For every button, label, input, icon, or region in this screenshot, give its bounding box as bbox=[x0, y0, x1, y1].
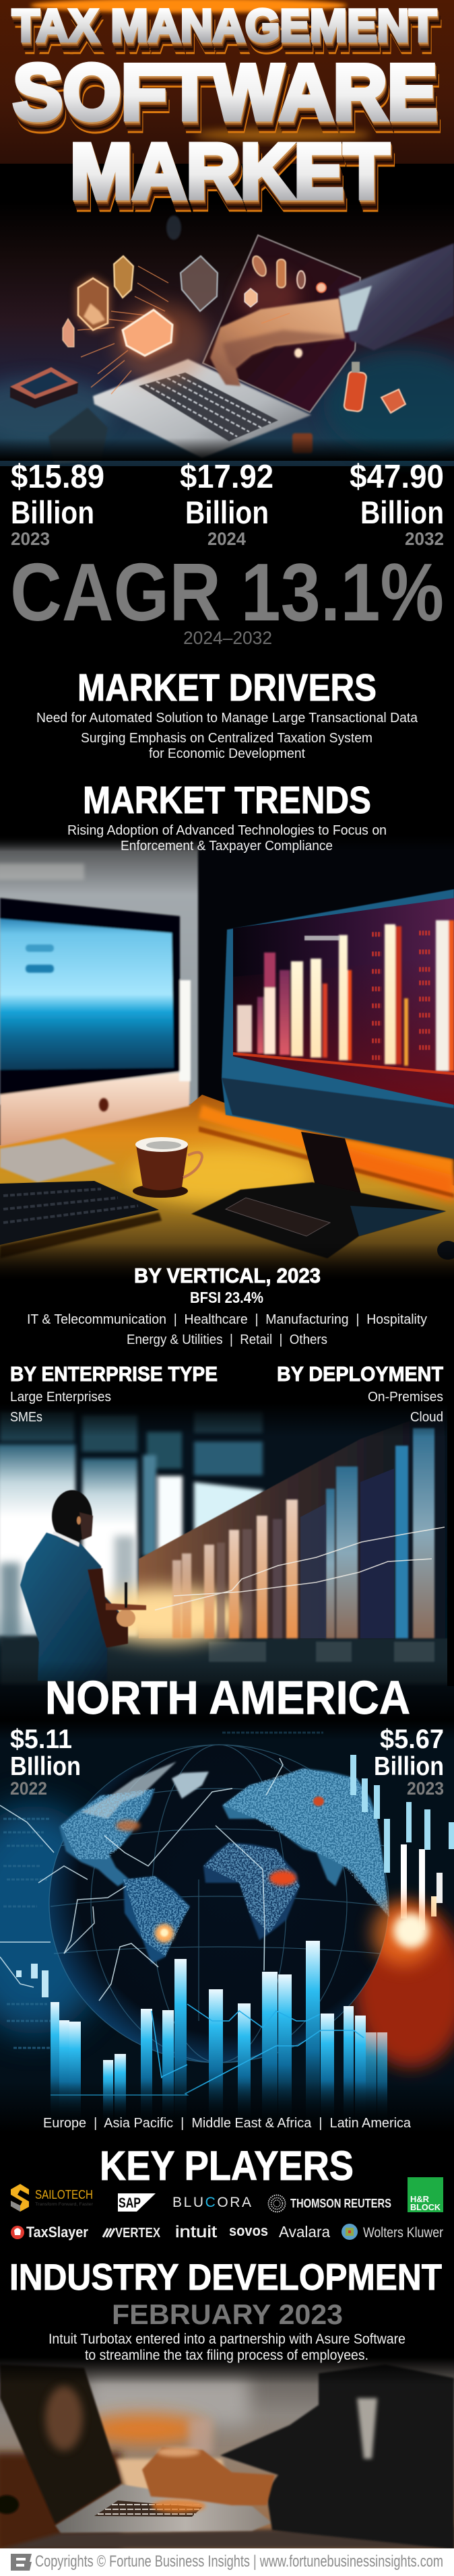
collar bbox=[53, 1531, 79, 1547]
stat 2022 bbox=[10, 1725, 81, 1799]
bright window panes bbox=[0, 1444, 263, 1637]
logo: h&r block bbox=[408, 2177, 443, 2212]
hotspot: asia bbox=[313, 1797, 324, 1806]
item: smes: SMEs bbox=[10, 1410, 42, 1425]
bottom fade bbox=[0, 1243, 454, 1280]
title line: Software: SOFTWARE bbox=[13, 48, 437, 136]
stat 2022: $5.11 bbox=[10, 1725, 72, 1754]
sun glow bbox=[372, 1901, 436, 1966]
sun flare bbox=[393, 1913, 428, 1948]
logo: h&r block: H&R bbox=[410, 2194, 430, 2204]
hero bottom fade bbox=[0, 438, 454, 461]
blue screen bbox=[0, 919, 174, 1070]
orange glow behind right monitor bbox=[199, 1105, 454, 1192]
bezel bbox=[0, 898, 180, 1095]
knuckle highlight bbox=[157, 2447, 200, 2457]
dark object bbox=[0, 2495, 19, 2514]
blur labels on left screen bbox=[26, 944, 54, 952]
stat 2023: 2023 bbox=[11, 529, 50, 549]
orange sunset glow bbox=[84, 2414, 205, 2444]
key players bbox=[11, 2143, 443, 2241]
continent: greenland bbox=[172, 1772, 209, 1799]
heading: market trends: MARKET TRENDS bbox=[83, 779, 371, 822]
logo: sap: SAP bbox=[119, 2195, 141, 2211]
photo top fade bbox=[0, 1720, 454, 1740]
white chin bbox=[0, 1071, 190, 1147]
item: cloud: Cloud bbox=[410, 1410, 443, 1425]
hand sparkle bbox=[294, 348, 302, 358]
warm glow bbox=[88, 1587, 242, 1644]
CAGR period: 2024–2032 bbox=[183, 628, 272, 648]
stat 2023: $5.67 bbox=[380, 1725, 444, 1754]
backdrop bbox=[0, 1403, 454, 1720]
jacket bbox=[20, 1533, 127, 1681]
stat 2032 bbox=[350, 459, 444, 549]
desk surface bbox=[0, 1095, 454, 1280]
hero background bbox=[0, 202, 454, 466]
logo: sailotech bbox=[11, 2184, 94, 2212]
backdrop bbox=[0, 1720, 454, 2131]
globe meridians bbox=[49, 1745, 389, 2063]
display bars bbox=[172, 1428, 434, 1638]
typing hands photo bbox=[0, 2358, 454, 2553]
stand foot bbox=[0, 1138, 116, 1182]
bar chart bbox=[51, 1941, 387, 2121]
icon: small cube bbox=[245, 288, 257, 307]
heading: by enterprise type: BY ENTERPRISE TYPE bbox=[10, 1362, 218, 1386]
coffee cup bbox=[133, 1137, 202, 1198]
date: FEBRUARY 2023 bbox=[112, 2298, 343, 2330]
stat 2024: 2024 bbox=[207, 529, 246, 549]
tablet bbox=[106, 1603, 146, 1610]
suit bbox=[220, 2364, 454, 2549]
logo: intuit: intuit bbox=[175, 2223, 217, 2241]
hero top fade bbox=[0, 164, 454, 211]
backdrop room bbox=[0, 2358, 454, 2549]
photo bottom fade bbox=[0, 1661, 454, 1721]
continent: south america bbox=[123, 1876, 190, 1964]
chart bars bbox=[237, 920, 454, 1071]
monitor base bbox=[191, 1182, 446, 1258]
blurred building bbox=[115, 1536, 135, 1617]
logo: sailotech: SAILOTECH bbox=[35, 2188, 93, 2201]
glow on lid bbox=[239, 272, 300, 321]
display blue panels bbox=[300, 1504, 326, 1638]
keys glow bbox=[152, 2499, 205, 2513]
heading: market drivers: MARKET DRIVERS bbox=[77, 666, 377, 709]
warm desk left bbox=[0, 2452, 121, 2553]
keyboard bbox=[139, 373, 278, 441]
trend lines bbox=[155, 1527, 445, 1610]
route lines bbox=[0, 1758, 283, 2001]
photo right fade bbox=[447, 1403, 454, 1686]
continent: africa bbox=[203, 1842, 300, 1940]
icon: capsule bbox=[250, 254, 269, 278]
development text line 2: to streamline the tax filing process of employees. bbox=[85, 2348, 368, 2363]
man bbox=[20, 1490, 146, 1681]
orange ledge right bbox=[337, 1145, 454, 1202]
laptop lid bbox=[203, 235, 360, 412]
icon: shield bbox=[77, 276, 109, 331]
glowing network lines bbox=[77, 266, 290, 394]
phone on base bbox=[226, 1198, 330, 1236]
logo: h&r block: BLOCK bbox=[410, 2202, 441, 2212]
hand bbox=[142, 2447, 275, 2505]
logo: sap bbox=[118, 2193, 156, 2212]
ledge shadow bbox=[199, 1126, 454, 1198]
logo: blucora: BLUCORA bbox=[172, 2195, 251, 2210]
icon: parcel bbox=[381, 389, 406, 413]
monitor neck bbox=[301, 1132, 365, 1207]
development text line 1: Intuit Turbotax entered into a partnership with Asure Software bbox=[48, 2331, 406, 2347]
hotspot: north america bbox=[116, 1820, 140, 1831]
continent light speckle bbox=[61, 1768, 389, 1957]
stat 2023: Billion bbox=[11, 494, 94, 530]
market trends bbox=[67, 779, 387, 854]
trends text line 1: Rising Adoption of Advanced Technologies to Focus on bbox=[67, 823, 387, 838]
logo: taxslayer: TaxSlayer bbox=[26, 2224, 88, 2241]
enterprise type and deployment segments bbox=[10, 1362, 443, 1425]
leading segment: BFSI 23.4% bbox=[190, 1289, 263, 1306]
item: on-premises: On-Premises bbox=[368, 1390, 443, 1405]
trends text line 2: Enforcement & Taxpayer Compliance bbox=[121, 839, 333, 854]
blurred room light bbox=[88, 2378, 249, 2425]
logo: vertex: VERTEX bbox=[115, 2226, 161, 2241]
logo: sailotech: Transform Forward, Faster bbox=[35, 2202, 94, 2207]
blue glow left bbox=[0, 1805, 115, 2034]
ear bbox=[77, 1516, 81, 1524]
logo: wolters kluwer bbox=[342, 2224, 443, 2241]
globe and bar chart photo bbox=[0, 1720, 454, 2132]
chart labels bbox=[372, 933, 431, 1058]
small orange box bbox=[292, 433, 313, 453]
stat 2024: Billion bbox=[185, 494, 269, 530]
stat 2022: 2022 bbox=[10, 1778, 47, 1799]
continent: eurasia bbox=[222, 1768, 389, 1917]
hero teal glow left bbox=[0, 377, 115, 445]
photo bottom fade bbox=[0, 2082, 454, 2132]
laptop base bbox=[55, 2484, 272, 2533]
driver text 2 second line: for Economic Development bbox=[149, 746, 305, 761]
red glow right bbox=[354, 1906, 454, 2068]
photo top fade bbox=[0, 2358, 454, 2385]
industry development bbox=[9, 2256, 442, 2363]
sleeve bbox=[88, 1568, 128, 1648]
icon: glowing box bbox=[121, 309, 174, 357]
glow behind software bbox=[195, 129, 370, 141]
title background bbox=[0, 0, 454, 164]
hand shadow bbox=[222, 330, 345, 368]
hotspot: africa bbox=[269, 1871, 296, 1886]
head bbox=[52, 1490, 92, 1543]
stat 2023 bbox=[374, 1725, 444, 1799]
photo top fade bbox=[0, 1403, 454, 1437]
lid glow bbox=[45, 2386, 83, 2451]
base blue tint bbox=[350, 1206, 446, 1236]
bright pillar bbox=[189, 2418, 212, 2455]
floor light blocks bbox=[209, 1642, 434, 1662]
driver text 1: Need for Automated Solution to Manage Large Transactional Data bbox=[36, 711, 418, 726]
cuff bbox=[339, 286, 372, 333]
icon: card box bbox=[10, 367, 78, 408]
hotspot core bbox=[160, 1929, 168, 1937]
mouse bbox=[437, 1241, 454, 1260]
shirt bbox=[357, 2398, 377, 2459]
driver text 2: Surging Emphasis on Centralized Taxation System bbox=[81, 731, 372, 746]
continent: arctic light bbox=[81, 1762, 176, 1819]
blurred skyline bbox=[0, 1563, 20, 1644]
top fade bbox=[0, 835, 454, 851]
title with 3D heading bbox=[12, 0, 437, 215]
hand bbox=[117, 1609, 135, 1627]
north america stats bbox=[10, 1725, 444, 1799]
blue frame bbox=[222, 889, 454, 1159]
dark wall bbox=[0, 835, 454, 1280]
market drivers bbox=[36, 666, 418, 761]
logo on left monitor bbox=[99, 1098, 108, 1112]
icon: pale cube bbox=[181, 256, 218, 311]
monitors photo bbox=[0, 835, 454, 1280]
desk bottom bbox=[0, 2526, 454, 2549]
market size stats bbox=[11, 459, 444, 549]
chart title bar bbox=[304, 936, 339, 940]
display wall bbox=[139, 1408, 447, 1638]
stat 2023: $15.89 bbox=[11, 459, 104, 495]
heading: by vertical: BY VERTICAL, 2023 bbox=[134, 1264, 321, 1287]
continent: north america bbox=[59, 1789, 155, 1886]
title line: Tax Management: TAX MANAGEMENT bbox=[12, 0, 436, 51]
yellow desk glow bbox=[131, 1147, 313, 1204]
display dark panel bbox=[360, 1469, 394, 1638]
stat 2032: 2032 bbox=[405, 529, 444, 549]
stat 2023: 2023 bbox=[407, 1778, 444, 1799]
left small candles bbox=[16, 1964, 48, 1997]
device lower left bbox=[48, 408, 108, 463]
stat 2024 bbox=[180, 459, 273, 549]
screen lower red bbox=[233, 957, 454, 1105]
icon: bottle bbox=[344, 362, 367, 412]
lower dim floor bbox=[0, 1637, 454, 1684]
right frame bbox=[179, 980, 191, 1081]
logo: thomson reuters: THOMSON REUTERS bbox=[290, 2197, 391, 2210]
hotspot: south america bbox=[155, 1924, 174, 1943]
heading: by deployment: BY DEPLOYMENT bbox=[277, 1362, 443, 1386]
upper window panes bbox=[0, 1411, 263, 1475]
item: large enterprises: Large Enterprises bbox=[10, 1390, 111, 1405]
stat 2023 bbox=[11, 459, 104, 549]
right monitor bbox=[222, 889, 454, 1159]
logo: thomson reuters bbox=[268, 2195, 391, 2212]
north america heading: NORTH AMERICA bbox=[45, 1671, 410, 1724]
by vertical segment bbox=[27, 1264, 427, 1347]
heading: key players: KEY PLAYERS bbox=[100, 2143, 354, 2189]
keyboard bbox=[0, 1181, 162, 1258]
icon: fortune logo bbox=[11, 2554, 32, 2571]
title line: Market: MARKET bbox=[70, 127, 389, 215]
sleeve bbox=[339, 243, 454, 350]
tablet edge bbox=[125, 1582, 127, 1608]
icon: warm glow centre bbox=[115, 303, 209, 384]
icon: dim top gem bbox=[166, 216, 181, 240]
footer bbox=[0, 2548, 454, 2576]
right chin bbox=[222, 1078, 454, 1159]
icon: tag bbox=[63, 319, 74, 347]
icon: tube bbox=[277, 259, 286, 288]
laptop base bbox=[93, 359, 311, 458]
icon: cube small bbox=[114, 256, 133, 298]
hand bbox=[210, 298, 345, 386]
analyst and bars photo bbox=[0, 1403, 454, 1721]
stat 2022: BIllion bbox=[10, 1752, 81, 1781]
hero image: hand on laptop with glowing icons bbox=[0, 164, 454, 466]
logo: avalara: Avalara bbox=[279, 2223, 330, 2241]
data text texture left bbox=[3, 1733, 323, 2048]
desk light bbox=[116, 2459, 229, 2513]
other regions: Europe | Asia Pacific | Middle East & Africa | Latin America bbox=[43, 2116, 412, 2131]
light wall left bbox=[0, 835, 198, 1105]
segment list line 2: Energy & Utilities | Retail | Others bbox=[127, 1332, 327, 1347]
chart baseline bbox=[233, 1052, 454, 1075]
shelf blur bbox=[0, 864, 84, 880]
logo: sovos: sovos bbox=[229, 2222, 268, 2239]
logo: vertex bbox=[103, 2226, 161, 2241]
right candles bbox=[350, 1755, 454, 1930]
screen bbox=[233, 898, 454, 1105]
globe bbox=[49, 1745, 389, 2063]
footer background bbox=[0, 2548, 454, 2576]
stat 2032: $47.90 bbox=[350, 459, 444, 495]
chart trend lines bbox=[51, 2004, 364, 2095]
blur button on left screen bbox=[26, 965, 54, 973]
keys bbox=[94, 2501, 202, 2517]
segment list line 1: IT & Telecommunication | Healthcare | Manufacturing | Hospitality bbox=[27, 1312, 427, 1327]
stat 2023: Billion bbox=[374, 1752, 444, 1781]
hero teal glow right bbox=[323, 350, 454, 458]
stat 2024: $17.92 bbox=[180, 459, 273, 495]
face bbox=[79, 1512, 93, 1540]
icon: pin bbox=[297, 271, 305, 288]
left monitor bbox=[0, 898, 191, 1182]
icon: wheel bbox=[317, 283, 326, 292]
laptop lid bbox=[0, 2364, 121, 2524]
orange top glow bbox=[30, 0, 347, 13]
